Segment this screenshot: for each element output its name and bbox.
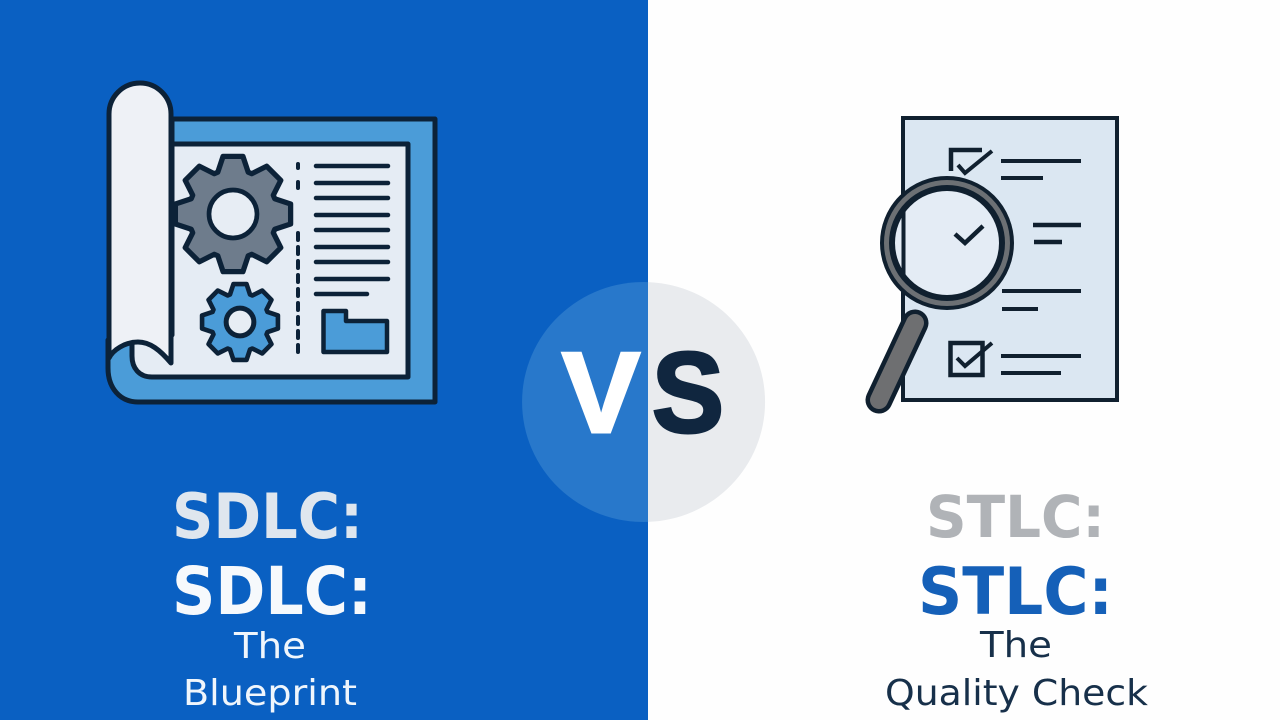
second item lines (1033, 225, 1081, 242)
small gear (202, 284, 278, 360)
badge circle, blue half (522, 282, 648, 522)
SDLC ghost heading: SDLC: (172, 480, 363, 553)
STLC title block (885, 483, 1148, 714)
third item lines (1002, 291, 1081, 309)
STLC subtitle line 1: The (979, 625, 1052, 666)
folder icon (324, 311, 387, 352)
STLC subtitle line 2: Quality Check (885, 673, 1148, 714)
icon: blueprint scroll (108, 83, 435, 402)
SDLC heading: SDLC: (172, 553, 372, 630)
letter V: V (562, 330, 640, 457)
blueprint outer frame (108, 119, 435, 402)
SDLC subtitle line 2: Blueprint (183, 673, 357, 714)
VS badge (522, 282, 765, 522)
panel: SDLC blue background (0, 0, 648, 720)
fourth checkbox item (950, 343, 1081, 375)
first checkbox item (951, 150, 1081, 178)
blueprint inner sheet (132, 144, 408, 377)
large gear (175, 156, 291, 272)
SDLC title block (172, 480, 372, 714)
STLC heading: STLC: (918, 555, 1113, 630)
SDLC subtitle line 1: The (233, 626, 306, 667)
checklist document (903, 118, 1117, 400)
magnifier lens and ring (886, 182, 1008, 304)
STLC ghost heading: STLC: (926, 483, 1105, 551)
badge circle, grey half (648, 282, 765, 522)
letter S: S (652, 330, 724, 457)
magnifier handle (879, 323, 915, 400)
paper roll (109, 83, 171, 363)
icon: checklist with magnifier (879, 118, 1117, 400)
dashed divider (296, 164, 300, 356)
panel: STLC white background (648, 0, 1280, 720)
spec text lines (316, 166, 388, 294)
